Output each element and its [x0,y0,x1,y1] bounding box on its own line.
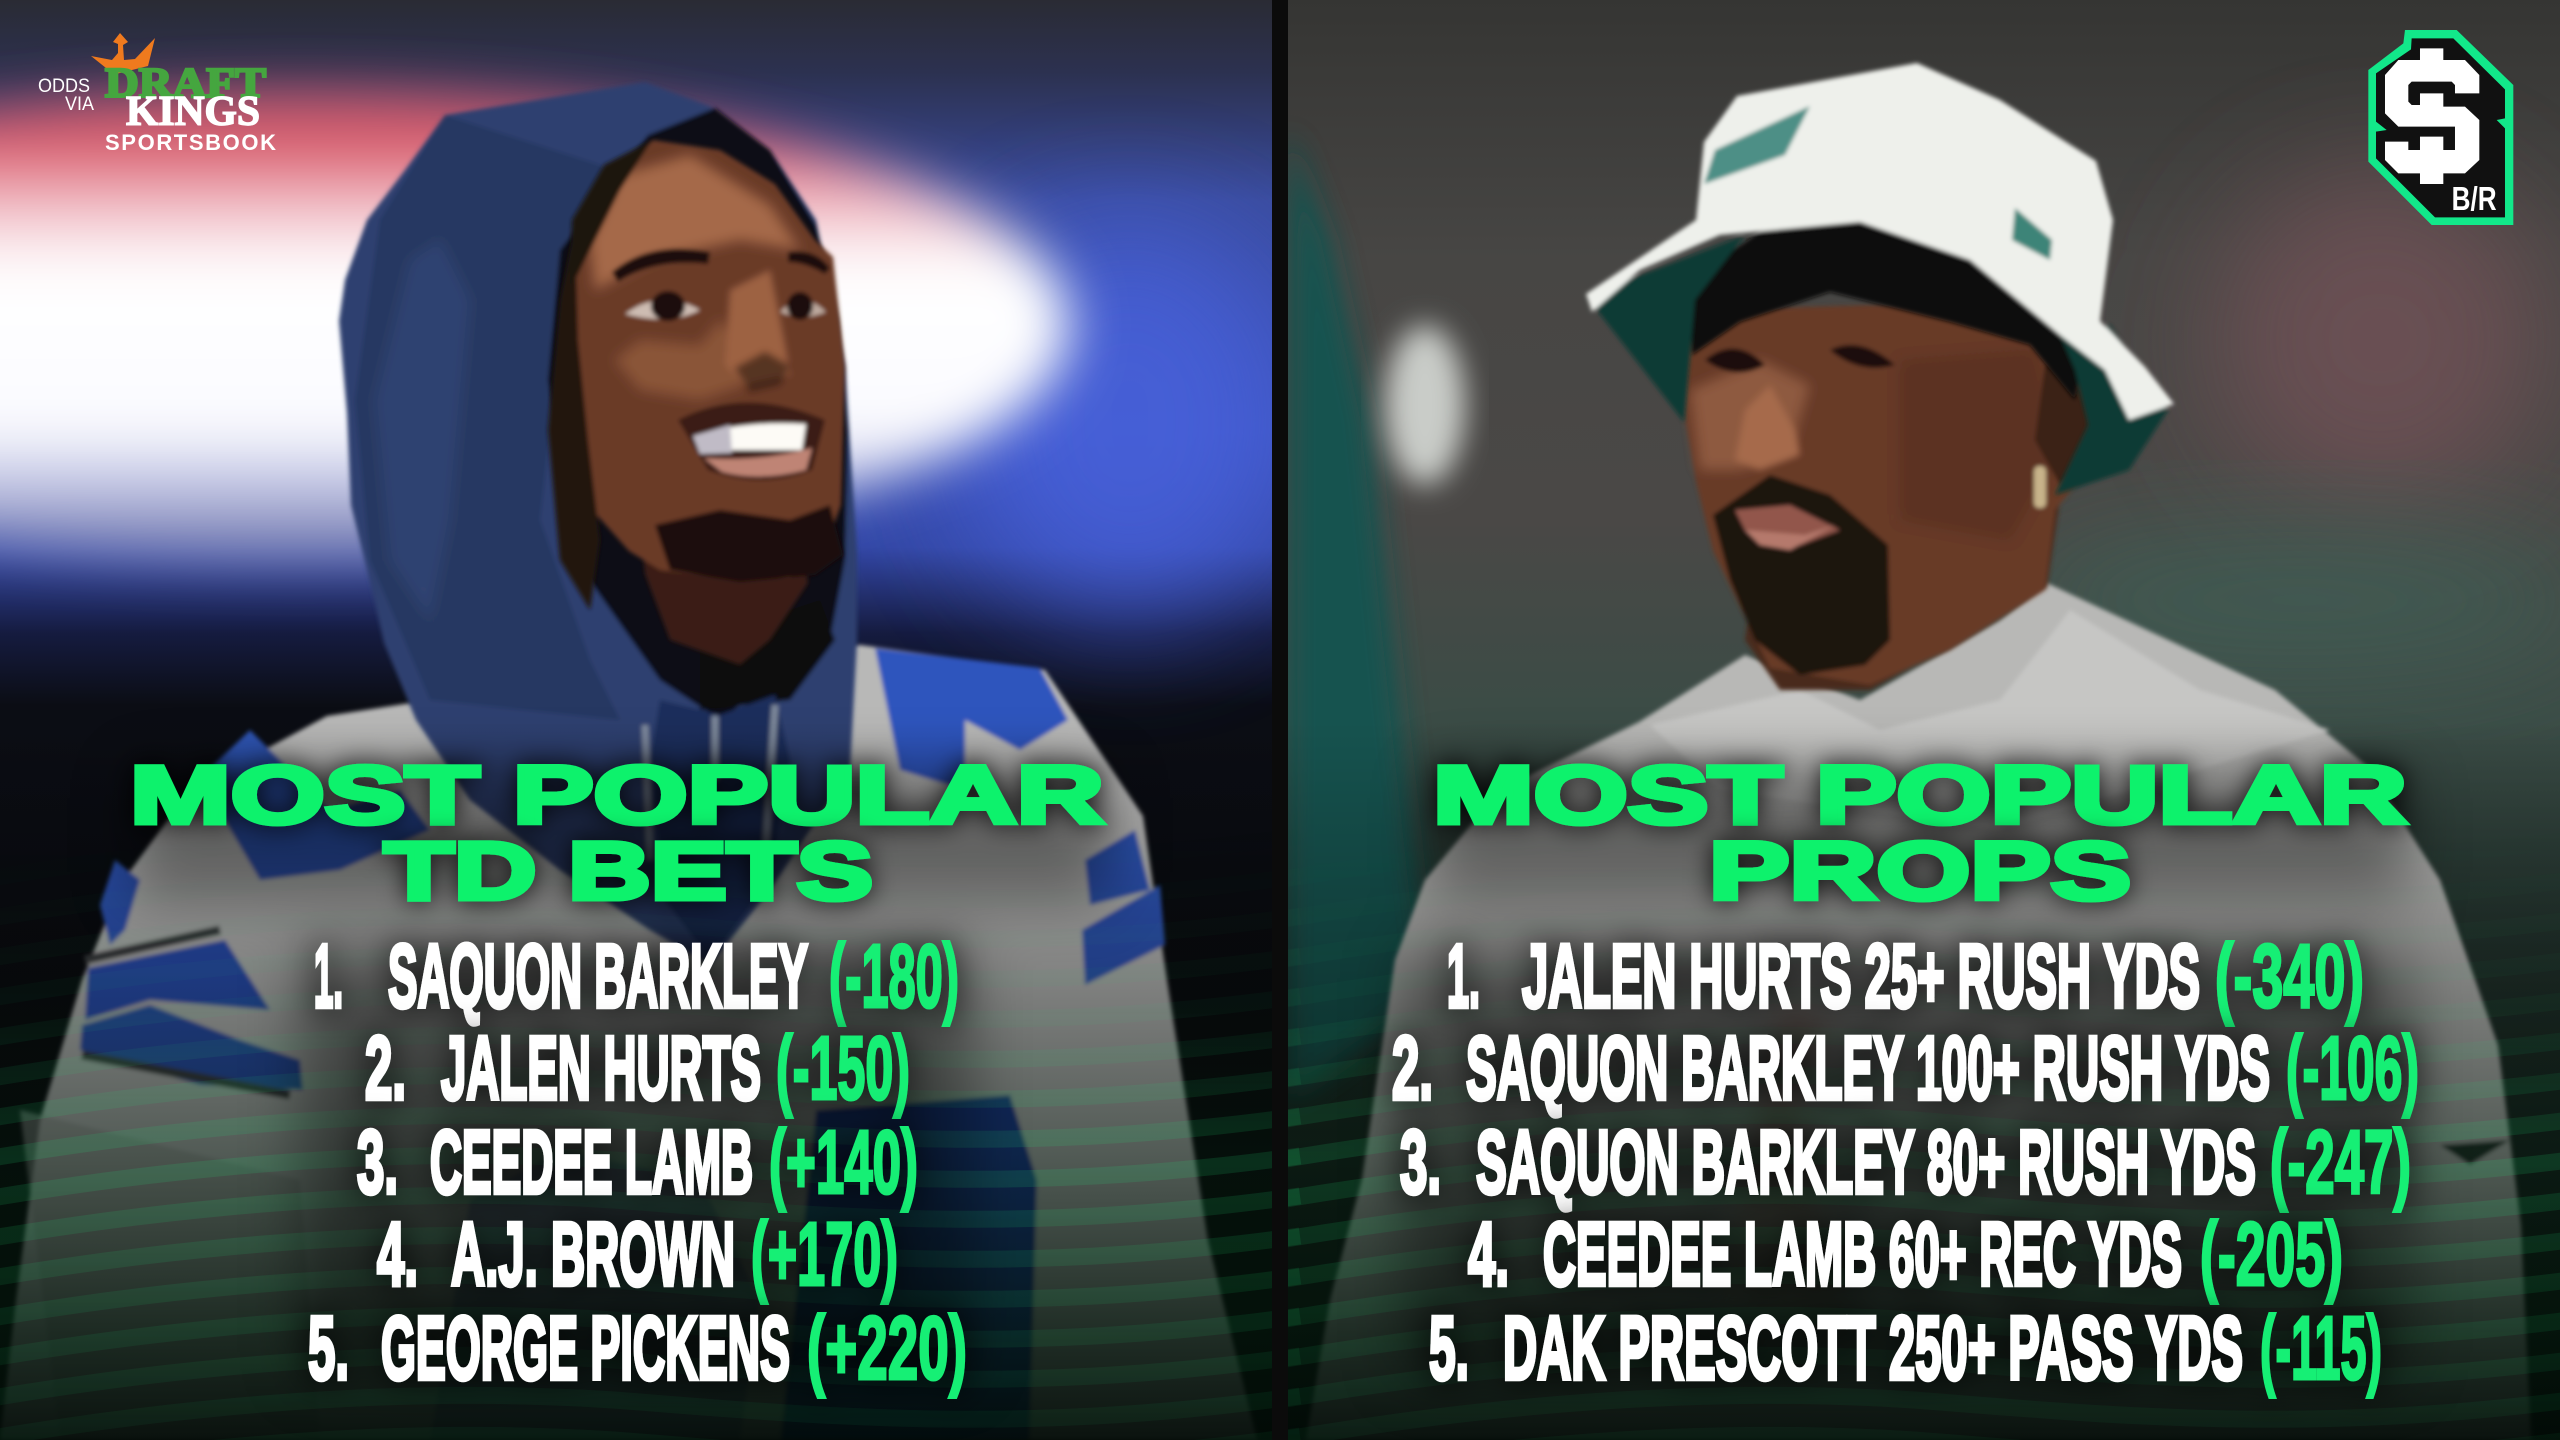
list item 2: (-150) [776,1019,910,1119]
DRAFT wordmark: DRAFT [105,61,266,107]
list item 1: 1. [1447,927,1480,1027]
list item 4: 4. [377,1205,418,1305]
odds via label [38,76,94,115]
panel: right photo of player in white bucket hat [1288,0,2560,1440]
soft dark halo behind text blocks [130,770,2410,1380]
dollar sign [2385,48,2479,184]
list item 5: 5. [1429,1299,1469,1399]
list item 1: 1. [314,927,343,1027]
crown [91,33,155,74]
list item 3: CEEDEE LAMB [430,1113,753,1213]
white bucket hat [1586,63,2174,495]
list item 4: A.J. BROWN [451,1205,735,1305]
odds via label: VIA [65,94,94,115]
player head [1684,300,2100,690]
logo: B/R betting dollar badge [2368,30,2513,225]
list item 2: (-106) [2286,1019,2419,1119]
heading: most popular props: PROPS [1709,826,2131,917]
list item 3: 3. [1400,1113,1441,1213]
eyebrows [612,249,830,282]
photo background: blurred stadium light streak [0,87,1300,620]
navy hood and jacket [339,82,857,965]
hair braids [548,225,600,610]
player face [548,140,845,665]
heading: most popular TD bets [130,750,1104,917]
earring [2034,466,2046,508]
goatee [655,505,843,582]
panel: TD bets text [130,750,1104,1399]
list item 3: (-247) [2270,1113,2411,1213]
list item 3: 3. [357,1113,398,1213]
list item 2: 2. [1392,1019,1433,1119]
list item 5: (+220) [807,1299,967,1399]
list item 5: 5. [308,1299,349,1399]
odds via label: ODDS [38,76,90,97]
list item 5 [308,1299,967,1399]
heading: most popular props: MOST POPULAR [1433,750,2407,841]
list item 4: 4. [1468,1205,1509,1305]
heading: most popular props [1433,750,2407,917]
mouth and grill [678,402,825,480]
list item 5: GEORGE PICKENS [381,1299,790,1399]
goatee and mustache [1713,475,1890,675]
grey shirt torso [1306,583,2531,1440]
list item 1: SAQUON BARKLEY [388,927,808,1027]
panel: props text [1392,750,2419,1399]
green curved stripe overlay [0,835,2560,1440]
list item 2: 2. [365,1019,406,1119]
list item 3: (+140) [769,1113,918,1213]
list item 3 [357,1113,918,1213]
heading: most popular TD bets: MOST POPULAR [130,750,1104,841]
jersey torso [0,645,1257,1440]
list item 4: (-205) [2200,1205,2343,1305]
panel: left photo of player in navy hood [0,0,1300,1440]
logo: odds via DraftKings Sportsbook [38,33,276,155]
hat brand mark [2012,208,2052,260]
heading: most popular TD bets: TD BETS [384,826,873,917]
list item 1: (-180) [829,927,959,1027]
B/R mark: B/R [2452,181,2497,218]
eyes [1705,345,1895,372]
eyes [625,300,700,319]
dark fade over both photos [0,720,2560,1440]
list item 4: (+170) [751,1205,898,1305]
photo background: blurred stadium [1288,130,2560,1100]
list item 2 [365,1019,910,1119]
SPORTSBOOK wordmark: SPORTSBOOK [105,130,276,155]
center divider [1272,0,1288,1440]
list item 2: JALEN HURTS [441,1019,761,1119]
list item 1 [314,927,959,1027]
list item 1: (-340) [2215,927,2364,1027]
list item 5: (-115) [2260,1299,2382,1399]
KINGS wordmark: KINGS [126,89,260,135]
hat eagle logo [1704,106,1810,184]
